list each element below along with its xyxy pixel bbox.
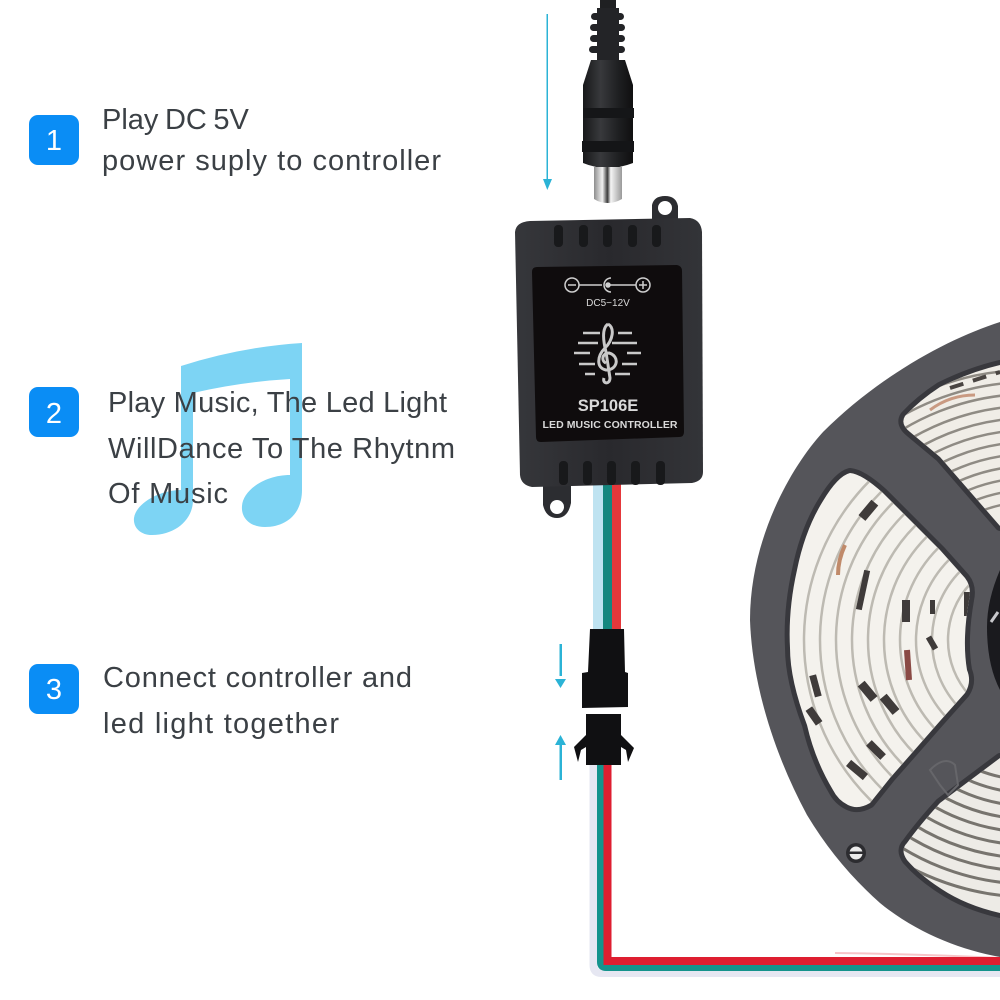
step 3 text: Connect controller and [103,662,412,694]
strain relief ribs [589,8,625,63]
step 2 text: WillDance To The Rhytnm [108,433,455,465]
voltage text: DC5−12V [586,298,630,309]
vents [554,225,665,485]
label plate [532,265,684,442]
icon: music note [134,343,302,535]
model text: SP106E [578,397,638,415]
power plug [582,0,634,203]
window grooves [790,365,1000,913]
strip coils, bottom right window [904,758,1000,913]
wires: connector to strip [594,765,1000,973]
LED strip reel [750,322,1000,957]
top mounting tab [652,196,678,222]
barrel [583,60,633,168]
step 3 text [103,662,412,740]
connector: lower [574,714,634,765]
recycling mark [930,761,958,795]
product text: LED MUSIC CONTROLLER [542,419,678,431]
reel hub [987,570,1000,690]
metal tip [594,167,622,203]
wires: controller to connector [593,482,621,632]
housing [515,218,703,487]
arrow: plug down [543,14,552,190]
step 3 text: led light together [103,708,339,740]
step 2 text: Of Music [108,478,228,510]
reel hole [846,843,866,863]
arrow: connector down [555,644,566,688]
connector: upper [582,629,628,708]
step 1 badge: 1 [46,125,62,157]
strip coils, top right window [903,365,1000,526]
bottom mounting tab [543,482,571,518]
step 2 text [108,387,455,510]
arrow: connector up [555,735,566,780]
step 1 text [102,104,441,177]
step 3 badge: 3 [46,674,62,706]
step 1 text: power suply to controller [102,145,441,177]
step 3 badge [29,664,79,714]
step 1 text: Play DC 5V [102,104,250,136]
step 2 badge [29,387,79,437]
cable [600,0,616,12]
step 1 badge [29,115,79,165]
step 2 badge: 2 [46,398,62,430]
step 2 text: Play Music, The Led Light [108,387,447,419]
music controller [515,196,703,518]
staff and clef icon [574,324,641,383]
polarity symbol [565,278,650,292]
strip coils, left window [790,473,970,808]
